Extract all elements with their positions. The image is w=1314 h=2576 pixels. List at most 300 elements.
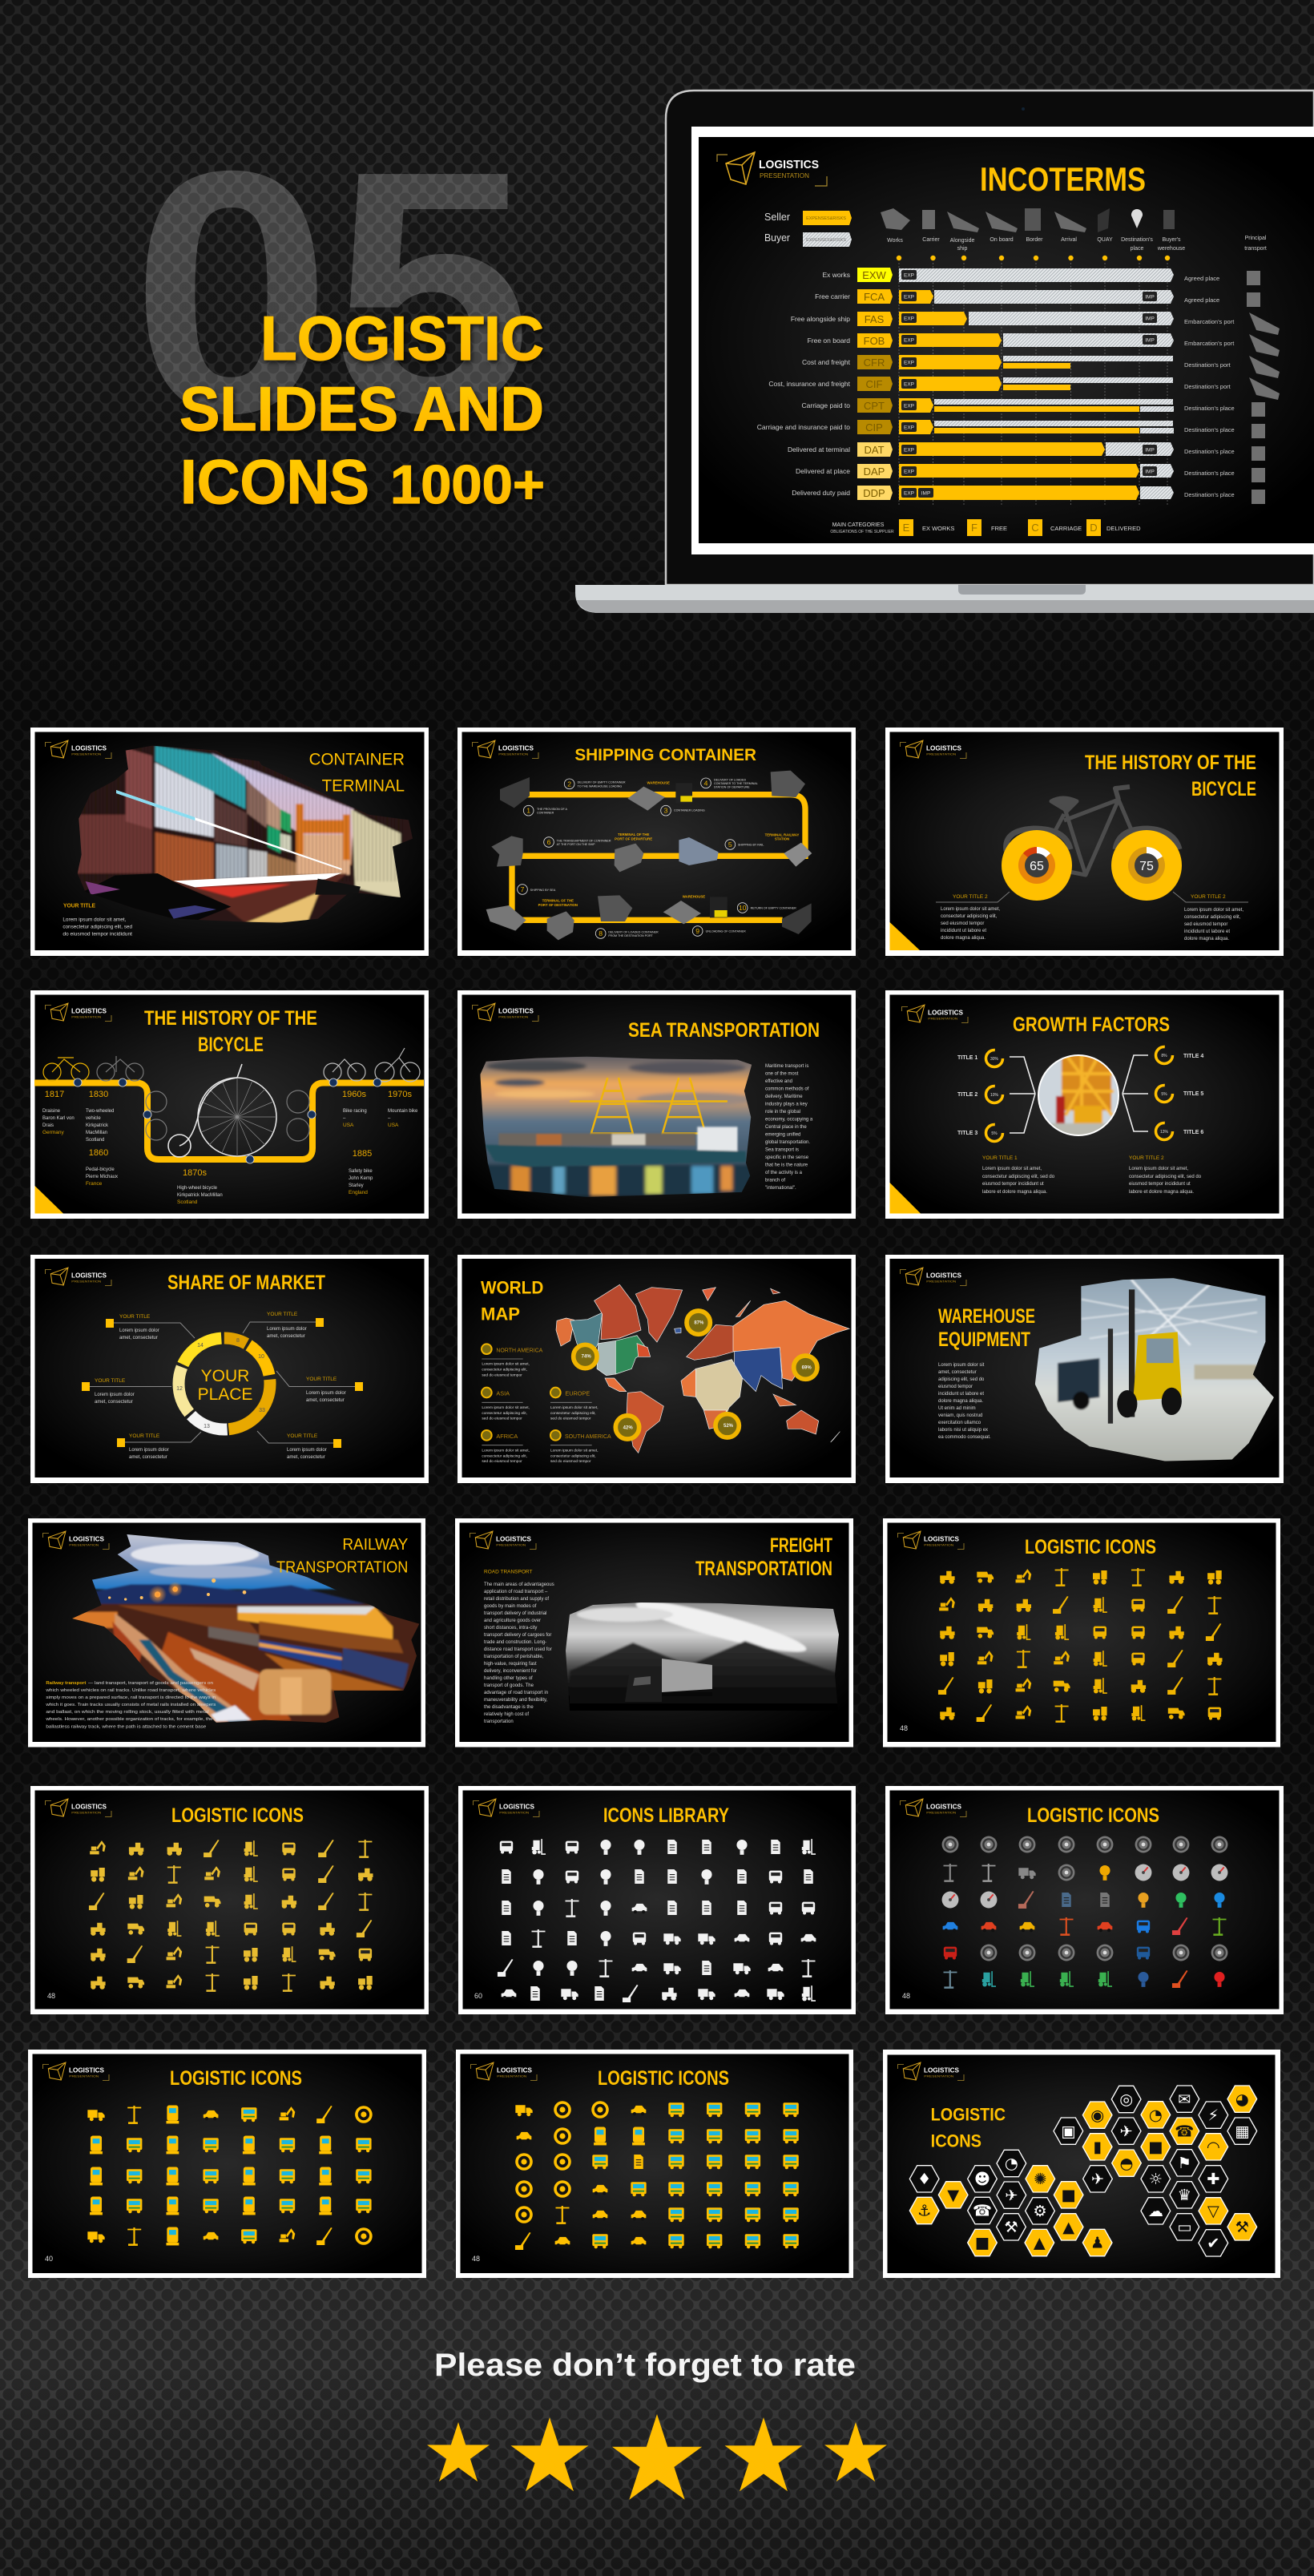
title: SHIPPING CONTAINER <box>574 745 756 764</box>
panel: shipping container <box>457 728 856 956</box>
callout left: consectetur adipiscing elit, <box>941 914 998 919</box>
panel: logistic icons transport one <box>28 2050 426 2278</box>
subhead and body copy <box>484 1569 554 1724</box>
callout markers <box>82 1318 363 1448</box>
incoterms slide <box>699 137 1314 543</box>
stage labels: Destination's <box>1121 237 1153 243</box>
black glyphs: ■ <box>1148 2138 1163 2156</box>
subhead and body copy: and agriculture goods over <box>484 1619 541 1623</box>
panel: container terminal <box>30 728 429 956</box>
term code badges: DDP <box>863 487 885 499</box>
timeline captions: Scotland <box>177 1199 198 1205</box>
body copy: eiusmod tempor <box>938 1385 973 1389</box>
callout text: Lorem ipsum dolor <box>129 1448 169 1453</box>
timeline captions: Kirkpatrick MacMillan <box>177 1193 223 1198</box>
logo: LOGISTICS <box>497 2066 532 2074</box>
right wheel gauge 75 <box>1111 830 1182 901</box>
title <box>695 1534 832 1580</box>
white glyphs: ▣ <box>1061 2122 1075 2140</box>
white glyphs: ✉ <box>1178 2090 1191 2108</box>
step captions: CONTAINER LOADING <box>674 809 705 812</box>
marker values: 69% <box>802 1365 812 1370</box>
logo <box>901 1799 966 1817</box>
seller yellow bars <box>899 290 1139 500</box>
headline: 1000+ <box>390 454 545 515</box>
callout text: amet, consectetur <box>119 1336 158 1340</box>
subhead and body copy: transport delivery of industrial <box>484 1611 546 1616</box>
text block right: consectetur adipiscing elit, sed do <box>1129 1175 1202 1179</box>
years: 1817 <box>45 1090 64 1099</box>
slide surface <box>889 1259 1279 1477</box>
title: LOGISTIC ICONS <box>598 2067 729 2090</box>
buyer hatched bars <box>899 268 1174 499</box>
page number: 48 <box>47 1992 55 2000</box>
callout left: Lorem ipsum dolor sit amet, <box>941 907 1000 912</box>
title: LOGISTIC ICONS <box>170 2067 302 2090</box>
subhead and body copy: transportation of perishable, <box>484 1655 544 1659</box>
timeline nodes <box>74 1078 381 1163</box>
panel: world map <box>457 1255 856 1483</box>
timeline captions: Germany <box>42 1130 64 1135</box>
body copy: of the activity is a <box>765 1171 803 1175</box>
years: 1830 <box>89 1090 108 1099</box>
years <box>45 1090 412 1178</box>
logo <box>45 1268 111 1285</box>
main categories legend: DELIVERED <box>1106 525 1141 532</box>
location labels: PORT OF DEPARTURE <box>615 836 652 841</box>
step captions: DELIVERY OF LOADED <box>714 779 746 782</box>
timeline captions: – <box>388 1116 391 1121</box>
logo: LOGISTICS <box>71 1006 107 1014</box>
slide frame <box>456 2050 853 2278</box>
white glyphs: ✈ <box>1091 2170 1104 2188</box>
main categories legend: OBLIGATIONS OF THE SUPPLIER <box>830 530 894 534</box>
slide frame <box>458 1786 856 2014</box>
title: RAILWAY <box>342 1535 409 1554</box>
laptop base <box>575 585 1314 613</box>
stage labels: QUAY <box>1097 237 1113 243</box>
title <box>938 1305 1035 1351</box>
slide frame <box>30 1786 429 2014</box>
title: WAREHOUSE <box>938 1305 1035 1328</box>
step digits <box>521 779 747 937</box>
location labels: STATION <box>775 837 789 841</box>
legend descriptions: consectetur adipiscing elit, <box>550 1453 596 1458</box>
slide surface <box>460 2054 849 2273</box>
step digits: 2 <box>567 780 571 788</box>
slide frame <box>457 1255 856 1483</box>
step captions: SHIPPING BY SEA <box>530 889 556 892</box>
legend markers <box>482 1344 561 1441</box>
page number: 40 <box>45 2255 53 2263</box>
logo: LOGISTICS <box>71 1271 107 1279</box>
stage labels <box>887 236 1267 252</box>
logo: LOGISTICS <box>926 744 961 752</box>
EXP IMP tags: IMP <box>1145 295 1155 300</box>
term names: Free carrier <box>815 292 850 300</box>
white glyphs: ☁ <box>1148 2202 1163 2220</box>
subhead and body copy: the disadvantage is the <box>484 1705 534 1710</box>
slide frame <box>28 1518 425 1747</box>
description <box>45 1681 216 1729</box>
seller buyer legend: EXPENSES&RISKS <box>806 216 846 221</box>
years: 1885 <box>353 1149 372 1159</box>
callout text <box>95 1312 346 1460</box>
white glyphs: ♦ <box>917 2170 931 2188</box>
ring values: 13% <box>1160 1130 1169 1135</box>
ring values: 10% <box>990 1093 999 1098</box>
headline <box>179 303 545 517</box>
term code badges: CIF <box>866 378 883 390</box>
page number: 60 <box>474 1992 482 2000</box>
EXP IMP tags: IMP <box>1145 447 1155 454</box>
subhead and body copy: delivery, inconvenient for <box>484 1669 537 1674</box>
icon grid <box>89 1840 373 1992</box>
logo <box>45 1799 111 1817</box>
right wheel gauge 75: 75 <box>1139 860 1154 873</box>
logo: LOGISTICS <box>71 744 107 752</box>
subhead and body copy: The main areas of advantageous <box>484 1582 554 1587</box>
subhead and body copy: retail distribution and supply of <box>484 1597 549 1602</box>
stage labels: Border <box>1026 237 1043 243</box>
legend descriptions: consectetur adipiscing elit, <box>482 1453 527 1458</box>
logo: PRESENTATION <box>924 2074 953 2078</box>
logo: LOGISTICS <box>926 1803 961 1811</box>
left icon columns <box>515 2101 647 2250</box>
donut center label: PLACE <box>198 1385 252 1404</box>
subhead and body copy: distance road transport used for <box>484 1647 552 1652</box>
process diagram <box>486 745 812 940</box>
term code badges: CFR <box>864 357 885 369</box>
legend descriptions: sed do eiusmod tempor <box>482 1459 522 1464</box>
parts icon grid <box>942 1836 1227 1989</box>
body copy: branch of <box>765 1178 785 1183</box>
slide frame <box>885 990 1284 1219</box>
callout right <box>1173 892 1248 941</box>
screen white frame <box>691 127 1314 554</box>
hexagon cluster <box>909 2086 1257 2256</box>
donut values: 10 <box>258 1354 264 1360</box>
legend descriptions: consectetur adipiscing elit, <box>482 1368 527 1373</box>
text block right: labore et dolore magna aliqua. <box>1129 1190 1194 1195</box>
title: ICONS <box>931 2131 981 2151</box>
logo <box>45 1003 111 1021</box>
caption: Lorem ipsum dolor sit amet, <box>62 917 126 923</box>
term code badges: CPT <box>864 400 885 412</box>
small bicycles <box>43 1048 420 1141</box>
term names: Free on board <box>808 337 850 345</box>
dark hexagons <box>909 2086 1257 2256</box>
logo: LOGISTICS <box>928 1008 963 1016</box>
ring values: 30% <box>990 1057 999 1062</box>
callout text: YOUR TITLE <box>95 1378 126 1384</box>
logo <box>897 1531 964 1550</box>
subhead and body copy: trade and construction. Long- <box>484 1640 546 1645</box>
central warehouse photo <box>1038 1054 1119 1136</box>
body copy: incididunt ut labore et <box>938 1392 984 1397</box>
delivery places: Destination's place <box>1184 491 1235 498</box>
trackpad notch <box>958 585 1086 595</box>
map and legend <box>481 1277 849 1464</box>
title: LOGISTIC ICONS <box>1027 1804 1159 1827</box>
white icon grid <box>498 1839 816 2002</box>
term code badges: FAS <box>865 313 885 325</box>
timeline captions: Mountain bike <box>388 1109 418 1114</box>
step captions <box>530 779 796 937</box>
legend names <box>496 1347 611 1440</box>
icon grid <box>938 1568 1223 1723</box>
caption: YOUR TITLE <box>63 902 95 909</box>
slide frame <box>457 990 856 1219</box>
world map continents <box>556 1284 849 1453</box>
legend descriptions <box>482 1362 599 1464</box>
description: — land transport, transport of goods and passengers on <box>88 1681 213 1686</box>
black glyphs: ▲ <box>1062 2218 1074 2236</box>
term code badges: FOB <box>864 335 885 347</box>
body copy: Sea transport is <box>765 1147 799 1152</box>
logo: PRESENTATION <box>926 1279 956 1284</box>
EXP IMP tags: EXP <box>904 404 914 409</box>
title: LOGISTIC <box>931 2105 1006 2125</box>
step captions: TO THE WAREHOUSE LOADING <box>578 784 622 788</box>
panel: logistic icons vehicle parts <box>885 1786 1284 2014</box>
railway photo and text <box>45 1530 425 1729</box>
location labels: TERMINAL OF THE <box>618 832 649 836</box>
legend descriptions: sed do eiusmod tempor <box>550 1459 591 1464</box>
stage labels: Arrival <box>1061 237 1077 243</box>
EXP IMP tags <box>901 270 1157 498</box>
route objects <box>486 771 812 940</box>
legend descriptions: Lorem ipsum dolor sit amet, <box>482 1362 530 1367</box>
main categories legend: F <box>971 522 977 534</box>
donut values: 13 <box>204 1424 210 1429</box>
location labels <box>538 780 800 907</box>
legend names: EUROPE <box>565 1390 590 1397</box>
title: LOGISTIC ICONS <box>171 1804 304 1827</box>
callout text: YOUR TITLE <box>267 1312 298 1317</box>
slide frame <box>28 2050 426 2278</box>
container photo <box>62 744 417 937</box>
legend descriptions: Lorem ipsum dolor sit amet, <box>550 1448 599 1453</box>
location labels: WAREHOUSE <box>647 780 670 784</box>
callout right: incididunt ut labore et <box>1184 929 1230 934</box>
step captions: DELIVERY OF EMPTY CONTAINER <box>578 781 626 784</box>
callout text: YOUR TITLE <box>129 1433 160 1439</box>
logo <box>471 2062 537 2080</box>
timeline captions: High-wheel bicycle <box>177 1186 218 1191</box>
corner accent <box>889 922 920 950</box>
title: SEA TRANSPORTATION <box>628 1019 820 1042</box>
logo <box>43 2062 109 2080</box>
body copy: Maritime transport is <box>765 1064 808 1069</box>
timeline captions: Kirkpatrick <box>86 1123 109 1128</box>
step digits: 8 <box>599 929 603 937</box>
text block left: YOUR TITLE 1 <box>982 1155 1018 1161</box>
logo <box>717 152 827 186</box>
ring values <box>990 1054 1169 1136</box>
timeline captions: Baron Karl von <box>42 1116 75 1121</box>
yellow route <box>512 795 805 920</box>
EXP IMP tags: IMP <box>921 490 930 497</box>
step captions: CONTAINER <box>537 811 554 814</box>
logo: LOGISTICS <box>499 1803 534 1811</box>
body copy: that he is the nature <box>765 1163 808 1168</box>
term code badges: DAT <box>864 444 885 456</box>
legend descriptions: consectetur adipiscing elit, <box>550 1411 596 1416</box>
marker values <box>582 1321 812 1431</box>
bus icon columns <box>668 2102 799 2248</box>
logo: PRESENTATION <box>497 2074 526 2078</box>
callout right: dolore magna aliqua. <box>1184 937 1229 941</box>
map percentage markers <box>574 1311 817 1439</box>
term names: Cost and freight <box>802 358 851 366</box>
step captions: FROM THE DESTINATION PORT <box>608 934 654 937</box>
laptop mockup <box>575 91 1314 613</box>
logo: LOGISTICS <box>498 744 534 752</box>
panel: history of the bicycle timeline <box>30 990 429 1219</box>
delivery places: Agreed place <box>1184 296 1219 304</box>
black glyphs: ▼ <box>947 2186 959 2204</box>
title <box>1085 752 1256 800</box>
subhead and body copy: transportation <box>484 1719 514 1724</box>
corner accent <box>889 1183 921 1213</box>
panel: freight transportation <box>455 1518 853 1747</box>
callout text: Lorem ipsum dolor <box>306 1391 346 1396</box>
EXP IMP tags: EXP <box>904 361 914 365</box>
factor titles: TITLE 3 <box>957 1131 977 1136</box>
location labels: WAREHOUSE <box>683 894 705 898</box>
photo <box>70 1530 425 1724</box>
body copy: laboris nisi ut aliquip ex <box>938 1428 988 1433</box>
main categories legend: E <box>903 522 910 534</box>
body copy: role in the global <box>765 1110 800 1115</box>
slide background <box>699 137 1314 543</box>
body copy: amet, consectetur <box>938 1370 977 1375</box>
delivery places: Destination's place <box>1184 470 1235 477</box>
white glyphs: ⚑ <box>1178 2154 1191 2172</box>
white glyphs: ▦ <box>1235 2122 1249 2140</box>
subhead and body copy: goods by main modes of <box>484 1604 537 1609</box>
text block right: Lorem ipsum dolor sit amet, <box>1129 1167 1188 1171</box>
EXP IMP tags: EXP <box>904 425 914 431</box>
stage labels: Alongside <box>950 238 974 244</box>
panel: sea transportation <box>457 990 856 1219</box>
white glyphs: ✈ <box>1005 2186 1018 2204</box>
callout right: sed eiusmod tempor <box>1184 922 1227 927</box>
main categories legend: EX WORKS <box>922 525 954 532</box>
caption: do eiusmod tempor incididunt <box>62 932 132 937</box>
callout text: YOUR TITLE <box>287 1433 318 1439</box>
logo: PRESENTATION <box>71 752 101 756</box>
subhead and body copy: handling other types of <box>484 1676 533 1681</box>
callout text: amet, consectetur <box>306 1398 345 1403</box>
donut values: 8 <box>236 1338 240 1344</box>
callout text: Lorem ipsum dolor <box>267 1327 307 1332</box>
logo <box>43 1531 109 1550</box>
factor titles: TITLE 2 <box>957 1092 977 1098</box>
factor titles: TITLE 1 <box>957 1055 977 1061</box>
logo <box>473 1799 539 1817</box>
black glyphs: ♟ <box>1090 2234 1104 2252</box>
stage labels: Buyer's <box>1162 237 1181 243</box>
logo: PRESENTATION <box>71 1279 101 1284</box>
delivery places: Destination's port <box>1184 361 1231 369</box>
title: SHARE OF MARKET <box>167 1272 325 1294</box>
text block left: consectetur adipiscing elit, sed do <box>982 1175 1055 1179</box>
text block right: YOUR TITLE 2 <box>1129 1155 1164 1161</box>
slide surface <box>888 1522 1276 1742</box>
body copy: industry plays a key <box>765 1103 808 1107</box>
donut values: 33 <box>259 1408 265 1413</box>
logo: PRESENTATION <box>498 1014 528 1019</box>
page number: 48 <box>900 1724 908 1732</box>
description: which wheeled vehicles on rail tracks. Unlike road transport, where vehicles <box>45 1688 216 1693</box>
left wheel gauge 65: 65 <box>1030 860 1044 873</box>
white glyphs: ✔ <box>1207 2234 1219 2252</box>
timeline captions: Pedal-bicycle <box>86 1167 115 1172</box>
headline: SLIDES AND <box>179 373 544 444</box>
title: GROWTH FACTORS <box>1013 1014 1170 1036</box>
stage labels: werehouse <box>1157 246 1185 252</box>
logo <box>902 1005 968 1022</box>
logo: PRESENTATION <box>924 1543 953 1546</box>
panel: railway transportation <box>28 1518 425 1747</box>
years: 1870s <box>183 1168 207 1178</box>
logo: LOGISTICS <box>759 158 819 171</box>
white glyphs: ♛ <box>1178 2186 1191 2204</box>
body copy: common methods of <box>765 1086 809 1091</box>
five star rating <box>427 2414 887 2500</box>
callout text: amet, consectetur <box>95 1400 133 1405</box>
white glyphs: ◎ <box>1119 2090 1133 2109</box>
title: ICONS LIBRARY <box>603 1804 729 1827</box>
title: FREIGHT <box>770 1534 832 1557</box>
stage labels: ship <box>957 246 968 252</box>
term names <box>757 271 851 497</box>
slide surface <box>35 1259 425 1477</box>
title: BICYCLE <box>198 1034 264 1056</box>
stage labels: Works <box>887 238 903 244</box>
logo: PRESENTATION <box>928 1016 957 1021</box>
text block right: eiusmod tempor incididunt ut <box>1129 1182 1191 1187</box>
stage labels: Principal <box>1245 236 1267 241</box>
subhead and body copy: advantage of road transport in <box>484 1691 548 1695</box>
callout text: Lorem ipsum dolor <box>119 1328 159 1333</box>
EXP IMP tags: EXP <box>904 316 914 322</box>
logo: PRESENTATION <box>496 1543 526 1546</box>
factor titles: TITLE 4 <box>1183 1054 1203 1059</box>
body copy: economy, occupying a <box>765 1117 813 1122</box>
description: simply moves on a prepared surface, rail transport is directed to the ways in <box>46 1695 216 1700</box>
title: LOGISTIC ICONS <box>1025 1536 1156 1558</box>
step digits: 1 <box>526 807 530 815</box>
main categories legend: D <box>1090 522 1098 534</box>
bicycle frame <box>1006 787 1179 875</box>
big faded number 05: 05 <box>131 100 532 485</box>
transport stage icons <box>881 208 1175 232</box>
slide frame <box>883 2050 1280 2278</box>
timeline captions: Pierre Michaux <box>86 1175 118 1179</box>
body copy: Ut enim ad minim <box>938 1406 976 1411</box>
callout text: amet, consectetur <box>287 1455 325 1460</box>
seller buyer legend: EXPENSES&RISKS <box>806 238 846 243</box>
step captions: THE TRANSSHIPMENT OF CONTAINER <box>557 840 611 843</box>
term names: Delivered at terminal <box>788 445 850 454</box>
truck photo <box>566 1602 839 1711</box>
body copy: dolore magna aliqua. <box>938 1399 983 1404</box>
panel: logistic icons machinery one <box>883 1518 1280 1747</box>
subhead and body copy: relatively high cost of <box>484 1712 529 1717</box>
